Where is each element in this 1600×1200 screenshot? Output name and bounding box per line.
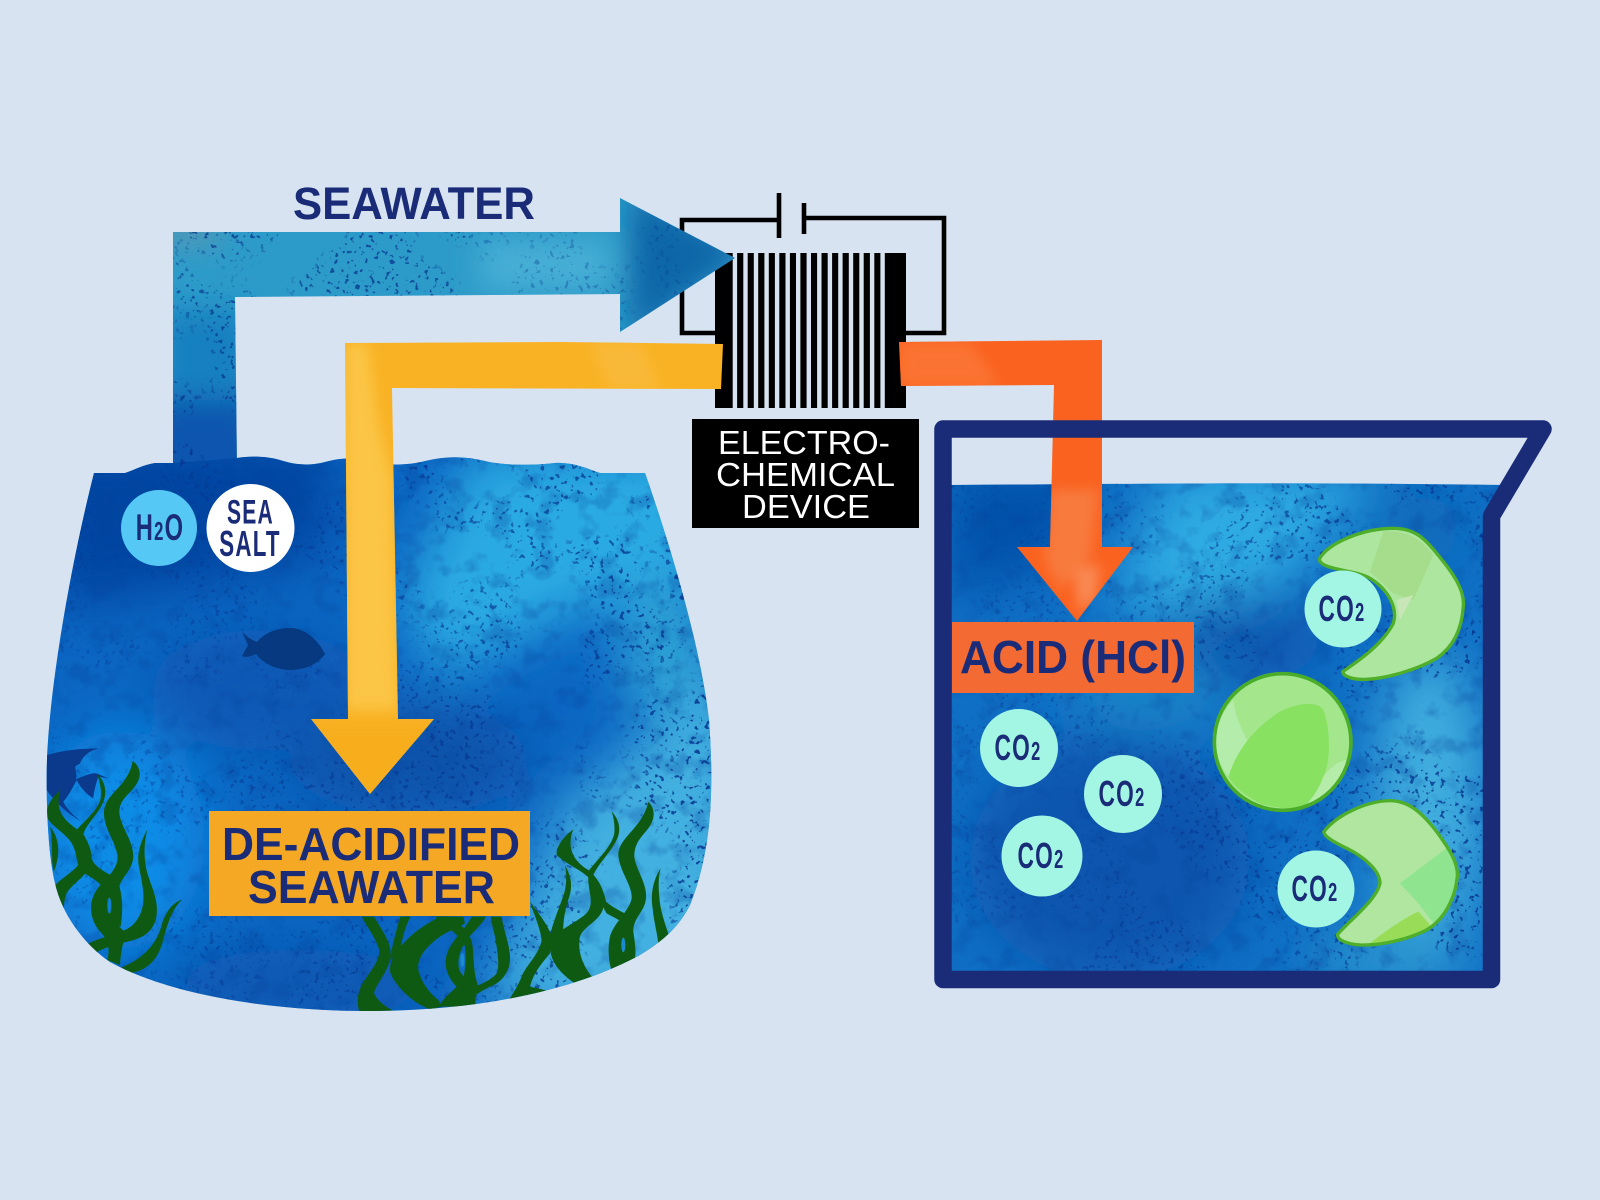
algae cells group (1214, 528, 1463, 945)
device label: CHEMICAL (716, 456, 895, 493)
free CO2 bubble 1: CO2 (995, 729, 1041, 768)
infographic canvas (46, 187, 1552, 1011)
beaker outline (943, 429, 1543, 980)
free CO2 bubble 3: CO2 (1018, 837, 1064, 876)
fish: angelfish silhouette (47, 748, 108, 822)
bound CO2 bubble upper (1304, 570, 1382, 648)
free CO2 bubble 2: CO2 (1099, 775, 1145, 814)
algae: upper crescent (1319, 528, 1463, 679)
H2O bubble (121, 490, 197, 566)
algae: round cell (1214, 674, 1351, 810)
sea salt bubble (206, 484, 294, 572)
sea salt bubble: SEA (227, 492, 274, 531)
battery circuit wires (682, 193, 944, 333)
tank water (945, 470, 1505, 990)
arrow: de-acidified water returning (300, 330, 730, 800)
de-acidified seawater label (209, 811, 530, 916)
sea salt bubble: SALT (219, 525, 281, 564)
de-acidified seawater label: SEAWATER (248, 861, 495, 913)
device label: ELECTRO- (718, 424, 890, 461)
algae: lower crescent (1324, 801, 1457, 945)
bound CO2 bubble upper: CO2 (1319, 590, 1365, 629)
acid label: ACID (HCl) (960, 631, 1186, 683)
free CO2 bubble 3 (1002, 816, 1082, 896)
fish: small silhouette (242, 628, 325, 670)
bound CO2 bubble lower: CO2 (1292, 870, 1338, 909)
seawater basin (46, 456, 712, 1011)
arrow: seawater to device (173, 198, 735, 463)
device label: DEVICE (742, 488, 870, 525)
seaweed: centre and right clumps (358, 802, 669, 1012)
free CO2 bubble 1 (980, 709, 1058, 787)
bound CO2 bubble lower (1278, 850, 1354, 928)
seawater heading: SEAWATER (293, 178, 535, 229)
acid tank (890, 330, 1543, 990)
device label (692, 419, 919, 528)
free CO2 bubble 2 (1084, 755, 1162, 833)
seaweed: left clump (47, 761, 183, 973)
acid arrow (899, 340, 1133, 621)
de-acidified seawater label: DE-ACIDIFIED (222, 818, 520, 870)
electrochemical device stack (715, 253, 906, 408)
H2O bubble: H2O (136, 507, 184, 548)
